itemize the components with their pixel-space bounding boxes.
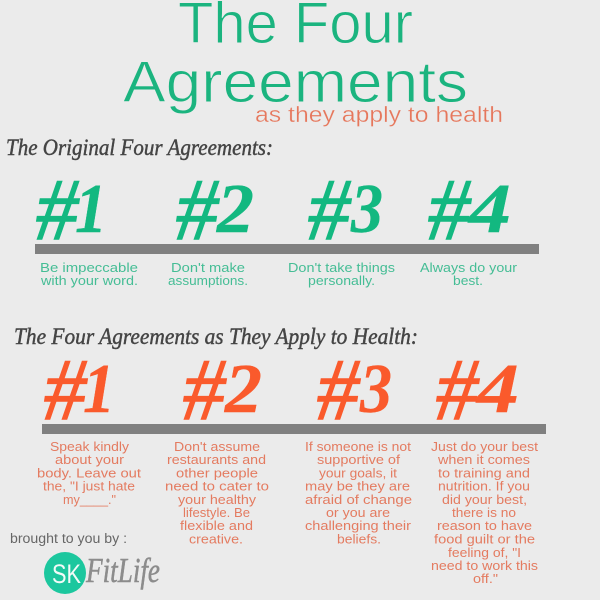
- label 2: Don't make: [171, 260, 245, 275]
- label 4: best.: [453, 273, 483, 288]
- number 4 red: #: [436, 342, 480, 439]
- logo: SK FitLife: [44, 551, 160, 594]
- divider bar green section: [35, 244, 539, 254]
- text block 2: creative.: [189, 532, 243, 546]
- text block 1: body. Leave out: [37, 466, 141, 480]
- text block 4: Just do your best: [431, 439, 538, 454]
- text block 3: your goals, it: [319, 466, 397, 480]
- text block 2: lifestyle. Be: [183, 505, 250, 520]
- text block 3: [305, 439, 412, 546]
- number 3 red: #: [317, 342, 361, 439]
- text block 2: Don't assume: [174, 439, 260, 454]
- number 4 green: 4: [467, 171, 511, 248]
- label 1: [40, 260, 138, 288]
- heading: original four agreements: The Original Four Agreements:: [6, 135, 273, 160]
- text block 1: my____.": [63, 492, 116, 507]
- number 1 green: 1: [75, 171, 107, 248]
- subtitle: as they apply to health: [255, 102, 503, 127]
- label 1: Be impeccable: [40, 260, 138, 275]
- number 1 red: [44, 342, 115, 439]
- text block 4: [431, 439, 539, 586]
- number 3 red: [317, 342, 392, 439]
- icon: SK circle: SK: [52, 559, 81, 589]
- number 2 green: [176, 162, 254, 259]
- text block 3: or you are: [326, 505, 390, 520]
- text block 4: off.": [473, 571, 498, 586]
- text block 1: [37, 439, 141, 507]
- text block 4: food guilt or the: [434, 532, 535, 546]
- number 3 green: 3: [350, 171, 383, 248]
- text block 3: beliefs.: [337, 532, 381, 546]
- logo wordmark: FitLife: [85, 551, 160, 590]
- text block 2: your healthy: [178, 492, 257, 507]
- number 2 red: 2: [224, 351, 262, 428]
- number 4 green: [428, 162, 511, 259]
- text block 4: reason to have: [437, 518, 532, 533]
- text block 4: feeling of, "I: [448, 545, 521, 560]
- text block 4: when it comes: [437, 452, 531, 467]
- number 2 green: #: [176, 162, 220, 259]
- text block 1: Speak kindly: [50, 439, 130, 454]
- title: Agreements: [123, 50, 468, 115]
- number 1 green: #: [36, 162, 80, 259]
- label 2: assumptions.: [168, 273, 248, 288]
- text block 2: [165, 439, 269, 546]
- credit text: brought to you by :: [10, 531, 127, 546]
- text block 3: supportive of: [317, 452, 400, 467]
- number 4 red: 4: [475, 351, 519, 428]
- label 4: [420, 260, 518, 288]
- label 4: Always do your: [420, 260, 518, 275]
- number 1 red: #: [44, 342, 88, 439]
- number 1 red: 1: [83, 351, 115, 428]
- label 3: Don't take things: [288, 260, 396, 275]
- number 3 red: 3: [359, 351, 392, 428]
- text block 4: to training and: [438, 466, 530, 480]
- text block 4: nutrition. If you: [438, 478, 530, 494]
- text block 4: there is no: [452, 505, 516, 520]
- text block 3: If someone is not: [305, 439, 411, 454]
- label 1: with your word.: [40, 273, 138, 288]
- number 1 green: [36, 162, 107, 259]
- text block 1: about your: [55, 452, 125, 467]
- text block 3: may be they are: [305, 478, 410, 494]
- number 3 green: [308, 162, 383, 259]
- label 3: personally.: [308, 273, 375, 288]
- text block 4: need to work this: [431, 558, 539, 573]
- label 2: [168, 260, 248, 288]
- title: [123, 0, 468, 115]
- number 2 green: 2: [216, 171, 254, 248]
- panel: original agreements: [35, 162, 539, 288]
- text block 2: restaurants and: [167, 452, 266, 467]
- text block 3: afraid of change: [305, 492, 412, 507]
- number 4 green: #: [428, 162, 472, 259]
- text block 3: challenging their: [305, 518, 412, 533]
- text block 2: need to cater to: [165, 478, 269, 494]
- text block 2: flexible and: [180, 518, 253, 533]
- text block 4: did your best,: [442, 492, 527, 507]
- text block 2: other people: [176, 466, 258, 480]
- text block 1: the, "I just hate: [43, 478, 135, 494]
- heading: applied to health: The Four Agreements as They Apply to Health:: [14, 324, 418, 349]
- label 3: [288, 260, 396, 288]
- panel: agreements applied to health: [37, 342, 546, 586]
- number 2 red: [183, 342, 262, 439]
- number 3 green: #: [308, 162, 352, 259]
- divider bar red section: [42, 424, 546, 434]
- number 4 red: [436, 342, 519, 439]
- number 2 red: #: [183, 342, 227, 439]
